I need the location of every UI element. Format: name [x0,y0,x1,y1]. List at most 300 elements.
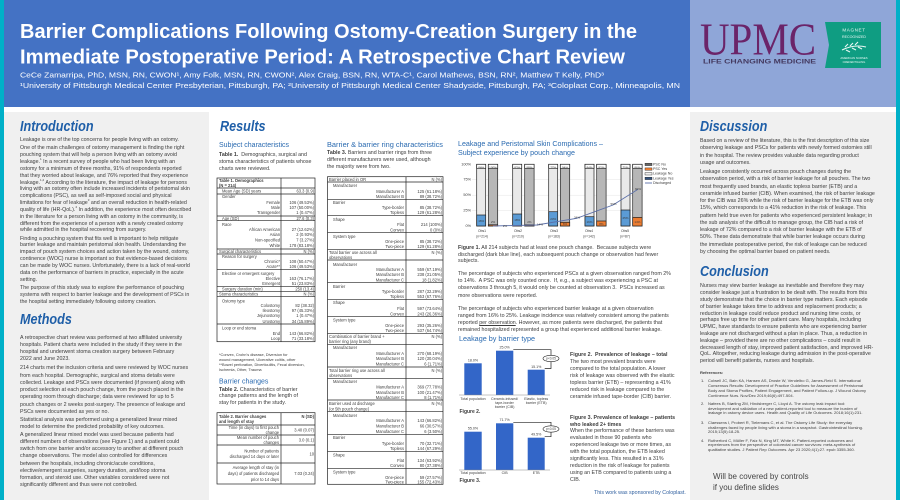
chart: figure 2 leakage total: Total population [460,397,486,401]
table 3: barrier and ring characteristics: Topless [390,294,404,299]
discussion paragraph 2: for the CIB was 26% while the risk of barrier leakage for the ETB was only [700,198,873,204]
introduction paragraph 3: data on the performance of barriers in practice, especially in the acute [20,270,184,276]
methods paragraph 3: switch from one barrier and/or accessory to another at different pouch [20,446,183,452]
chart: figure 1 stacked bars by pouch change: 59% [610,202,617,206]
table 3: barrier and ring characteristics: Barrier used at discharge [329,401,375,406]
text block: table 3 caption: the majority were from two. [327,164,391,170]
table 1: demographics: Surgery duration (min) [222,286,263,292]
text block: leakage findings: The percentage of subjects who experienced barrier leakage at a given observation [458,306,654,312]
methods paragraph 2: PSCs were documented as yes or no. [20,409,109,415]
table 2: barrier change patterns: changes [264,440,279,445]
chart: figure 1 stacked bars by pouch change: Obs4 [585,229,593,233]
table 3: barrier and ring characteristics: Manufacturer B [376,272,404,277]
table 1: demographics: Race [222,222,232,227]
text block: references: Body and Stoma Profiles, Patient Engagement, and Patient Follow-up. J Wound Ostomy [708,388,866,393]
table 3: barrier and ring characteristics: 70 (32.71%) [420,441,443,446]
table 1: demographics: 71 (33.18%) [292,336,315,341]
table 2: barrier change patterns: Table 2. Barrier changes [219,414,267,419]
chart: figure 1 stacked bars by pouch change: 6% [563,222,567,226]
table 3: barrier and ring characteristics: Shape [333,452,346,458]
chart: figure 3 leakage 2+ times: ETB [533,471,540,475]
table 3: barrier and ring characteristics: Convex [390,312,404,316]
text block: table 3 caption [327,150,432,170]
heading: results: Results [220,119,266,135]
table 3: barrier and ring characteristics: 134 (63.92%) [417,458,443,463]
table 1: demographics: 82 (38.32) [295,303,315,308]
methods paragraph 1: A retrospective chart review was performed at two affiliated university [20,335,182,341]
chart: figure 1 stacked bars by pouch change: Obs2 [514,229,522,233]
text block: conclusion: UPMC, have standards to ensure patients who are experiencing barrier [700,324,867,330]
text block: figure 2 description: Figure 2. Prevalence of leakage – total [570,352,667,358]
table 3: barrier and ring characteristics: Manufacturer C [376,395,404,400]
chart: figure 1 stacked bars by pouch change: (n=87) [620,235,630,239]
text block: references: Claessens I, Probert R, Tielemans C, et al. The Ostomy Life Study: the everyday [708,420,852,425]
chart: figure 1 stacked bars by pouch change: 14% [634,220,641,224]
table 1: demographics: Chronic* [264,259,280,264]
table 3: barrier and ring characteristics: System type [333,234,356,239]
table 3: barrier and ring characteristics: Manufacturer [333,413,358,418]
text block: conclusion: decreased length of stay, improved patient satisfaction, and improved HR- [700,345,873,351]
chart: figure 1 stacked bars by pouch change: 8% [599,222,604,226]
header band: title area [0,0,690,107]
title: Barrier Complications Following Ostomy-Creation Surgery in the [20,21,637,43]
text block: references: Continence Nurs. Nov/Dec 2019;46(6):497-504. [708,392,794,398]
table 3: barrier and ring characteristics: observations [329,373,352,378]
introduction paragraph 3: can be made by WOC nurses. Unfortunately, there is a lack of real-world [20,263,190,269]
table 1: demographics: 1 (0.47%) [296,210,315,215]
text block: figure 1 caption: discharged (dark blue line), each subsequent pouch change or observation had fewer [458,252,658,258]
table 2: barrier change patterns [217,413,315,484]
table 3: barrier and ring characteristics: 143 (66.82%) [417,418,443,423]
table 1: demographics: Elective or emergent surgery [222,271,275,276]
table 3: barrier and ring characteristics: N (%) [432,368,443,373]
table 1: demographics: Mean Age (SD) years [222,188,261,194]
table 1: demographics: Asian [270,232,281,237]
heading: leakage and peristomal skin complications: Subject experience by pouch change [458,150,575,157]
methods paragraph 3: different numbers of observations (see Figure 1) and a patient could [20,439,179,445]
discussion paragraph 2: 50%. These data demonstrate that while barrier leakage occurs during [700,234,865,240]
discussion paragraph 1: observing leakage and PSCs for patients with newly formed ostomies still [700,145,872,151]
text block: conclusion: period will benefit patients, nurses and hospitals. [700,358,814,364]
table 1: demographics: 27 (12.62%) [292,227,315,232]
table 2: barrier change patterns: Time (in days) to first pouch [229,425,280,430]
placeholder note: if you define slides [713,483,779,492]
table 3: barrier and ring characteristics: Manufacturer [333,183,358,188]
text block: PSC findings [458,271,671,299]
table 2: barrier change patterns: change [266,430,280,435]
table 1: demographics: 51 (23.83%) [292,281,315,286]
text block: conclusion: leakage – provided there are no other complications – could result in [700,338,860,344]
table 3: barrier and ring characteristics [328,177,443,484]
text block: references: development and validation of a new patient-reported tool to measure the burden of [708,406,857,411]
text block: figure 3 description: CIB. [570,477,580,483]
chart: figure 1 stacked bars by pouch change: 16% [586,220,593,224]
table 3: barrier and ring characteristics: Combination of barrier brand + [329,334,385,339]
table 3: barrier and ring characteristics: Manufacturer B [376,356,404,361]
table 3: barrier and ring characteristics: Two-piece [385,328,405,333]
heading: conclusion: Conclusion [700,264,769,280]
figure 2 label: Figure 2. [460,409,481,415]
table 3: barrier and ring characteristics: 8 (1.71%) [424,395,443,400]
table 3: barrier and ring characteristics: barrier ring (any brand) [329,339,372,344]
chart: figure 2 leakage total [459,346,559,409]
discussion paragraph 1: in the hospital. The review provides valuable data regarding product [700,153,859,159]
text block: figure 2 description: topless barrier (ETB) – representing a 41% [570,380,671,386]
table 3: barrier and ring characteristics: 80 (37.38%) [420,463,443,468]
methods paragraph 2: product selection at each pouch change, from the pouch placed in the [20,387,183,393]
introduction paragraph 2: leakage.1,2 According to the literature, the impact of leakage for persons [20,178,187,186]
table 3: barrier and ring characteristics: Manufacturer B [376,424,404,428]
introduction paragraph 2: living with an ostomy often include increased incidents of peristomal skin [20,186,190,192]
chart: figure 1 stacked bars by pouch change: 23% [550,217,557,221]
table 1: demographics: Surgical characteristics [219,249,261,254]
heading: introduction: Introduction [20,119,94,135]
text block: PSC findings: The percentage of subjects who experienced PSCs at a given observation ranged from 2% [458,271,671,277]
table 1: demographics: 27.6 (0.3) [296,216,315,221]
table 1: demographics: Stoma characteristics [219,292,258,296]
chart: figure 1 stacked bars by pouch change: 84% [586,166,593,170]
methods paragraph 3: elective/emergent surgeries, surgery duration, and/loop stoma [20,468,165,474]
table 3: barrier and ring characteristics: Manufacturer B [376,194,404,199]
table 3: barrier and ring characteristics: N (%) [432,334,443,339]
discussion paragraph 1 [700,138,872,166]
chart: figure 1 stacked bars by pouch change: 25% [622,216,629,220]
chart: figure 1 stacked bars by pouch change: 82% [514,166,521,170]
text block: figure 3 description [570,415,675,483]
placeholder note [713,472,809,492]
table 3: barrier and ring characteristics: Convex [390,228,404,232]
chart: figure 2 leakage total: Ceramic-infused/ [491,397,518,401]
table 3: barrier and ring characteristics: Manufacturer A [376,418,404,423]
chart: figure 1 stacked bars by pouch change: 16% [478,219,485,223]
heading: methods: Methods [20,312,72,328]
table 3: barrier and ring characteristics: 18 (1.82%) [422,278,443,282]
placeholder note: Will be covered by controls [713,472,809,481]
chart: figure 2 leakage total: 18.0% [468,358,479,362]
table 3: barrier and ring characteristics: System type [333,470,356,474]
text block: introduction [20,137,191,305]
table 3: barrier and ring characteristics: Topless [390,446,404,451]
chart: figure 2 leakage total: 25.0% [499,346,510,350]
chart: figure 1 stacked bars by pouch change [461,162,674,239]
methods paragraph 2 [20,365,188,415]
text block: figure 3 description: reduction in the risk of leakage for patients [570,463,670,469]
logo: UPMC: LIFE CHANGING MEDICINE [703,58,817,66]
table 1: demographics: 106 (49.53%) [289,264,315,269]
introduction paragraph 2 [20,145,191,233]
table 3: barrier and ring characteristics: 287 (32.29%) [417,289,443,294]
discussion paragraph 2: most frequently used brands, an elastic topless barrier (ETB) and a [700,184,857,190]
table 3: barrier and ring characteristics: 238 (31.05%) [417,272,443,277]
chart: figure 3 leakage 2+ times: 49.5% [531,432,542,436]
methods paragraph 3: between the hospitals, including chronic/acute conditions, [20,460,155,466]
table 1: demographics: 143 (66.82%) [289,331,315,336]
text block: references: leakage in ostomy device users. Health and Quality of Life Outcomes. 2018;16(1):231. [708,410,863,415]
introduction paragraph 4: The purpose of this study was to explore the performance of pouching [20,285,184,291]
text block: table 2 caption: stay for patients in the study. [219,400,286,406]
chart: figure 1 stacked bars by pouch change: 2% [527,220,532,224]
table 3: barrier and ring characteristics: 155 (72.43%) [417,480,443,484]
icon: magnet recognized badge: CREDENTIALING [843,60,865,64]
methods paragraph 2: collected. Leakage and PSCs were documented (if present) along with [20,380,185,386]
text block: table 1 footnotes: wound management, Ulcerative colitis, other [219,357,296,362]
text block: leakage findings: ranged from 16% to 25%. Leakage incidence was relatively consistent among the patients [458,313,669,319]
text block: figure 1 caption [458,245,658,264]
table 3: barrier and ring characteristics: 100 (21.47%) [417,390,443,395]
table 3: barrier and ring characteristics: 597 (73.64%) [417,306,443,311]
text block: table 1 footnotes: *Convex, Crohn's disease, Diversion for [219,352,288,357]
table 3: barrier and ring characteristics: 6 (1.71%) [424,362,443,366]
text block: references: Consensus Results: Development of Practice Guidelines for Assessment of Peristomal [708,383,863,388]
chart: figure 1 stacked bars by pouch change: (n=183) [548,235,560,239]
table 3: barrier and ring characteristics: Barrier placed in OR [329,177,366,182]
text block: table 1 caption [219,152,312,172]
text block: references: 2015;13(5):18-25. [708,429,740,434]
subheading: subject characteristics: Subject characteristics [219,142,290,149]
discussion paragraph 1: Based on a review of the literature, this is the first description of this size [700,138,869,144]
chart: figure 1 stacked bars by pouch change: 75% [463,178,472,182]
table 1: demographics: Jejunostomy [257,313,281,318]
discussion paragraph 2: 15%, which corresponds to a 41% reduction in the risk of leakage. This [700,205,866,211]
table 3: barrier and ring characteristics: N (%) [432,401,443,406]
discussion paragraph 2: by choosing the optimal barrier based on patient needs. [700,249,830,255]
table 3: barrier and ring characteristics: One-piece [385,239,405,244]
table 3: barrier and ring characteristics: Type-border [382,289,405,294]
table 1: demographics: Emergent [262,281,281,286]
text block: table 1 footnotes: **Bowel perforation, Diverticulitis, Fecal diversion, [219,362,305,367]
text block: table 1 caption: Table 1. Demographics, surgical and [219,152,307,158]
discussion paragraph 2: observation period, with a risk of barrier leakage for all pouches. The two [700,176,870,182]
table 3: barrier and ring characteristics: Flat [397,222,405,227]
introduction paragraph 2: One of the main challenges of ostomy management is finding the right [20,145,184,151]
table 1: demographics: Urostomy [262,319,281,324]
text block: table 2 caption: change patterns and the length of [219,393,298,399]
chart: figure 1 stacked bars by pouch change: 84% [478,166,485,170]
right accent strip [896,0,900,500]
subheading: barrier and barrier ring characteristics: Barrier & barrier ring characteristics [327,142,444,149]
table 1: demographics: White [270,243,281,248]
table 3: barrier and ring characteristics: 66 (30.57%) [420,424,443,428]
table 3: barrier and ring characteristics: Shape [333,217,346,222]
text block: figure 2 description: ceramide infused tape-border (CIB) barrier. [570,394,671,400]
chart: figure 3 leakage 2+ times: CIB [502,471,508,475]
discussion paragraph 2: leakage of 72% compared to a risk of barrier leakage with the ETB of [700,227,862,233]
table 3: barrier and ring characteristics: Manufacturer B [376,390,404,395]
chart: figure 2 leakage total: barrier (CIB) [495,405,514,409]
introduction paragraph 2: while admitted in the hospital recovering from surgery. [20,227,146,233]
introduction paragraph 2: in the literature for a person living with an ostomy in the community, is [20,214,183,220]
icon: magnet recognized badge [825,22,881,68]
introduction paragraph 2: quality of life (HR-QoL).4 In addition, the experience most often described [20,205,191,213]
text block: references: qualitative studies. J Patient Rep Outcomes. Apr 23 2020;4(1):27. epub 3355-360. [708,447,855,452]
table 1: demographics: N (%) [304,292,315,296]
table 3: barrier and ring characteristics: N (%) [432,177,443,182]
table 3: barrier and ring characteristics: Type-border [382,441,405,446]
table 3: barrier and ring characteristics: Topless [390,210,404,215]
chart: figure 1 stacked bars by pouch change: (n=214) [476,235,488,239]
table 1: demographics: Ostomy type [222,298,246,304]
methods paragraph 1: hospital and underwent stoma creation surgery between February [20,349,174,355]
table 1: demographics: End [273,331,281,336]
table 2: barrier change patterns: N (SD) [301,414,315,419]
table 2: barrier change patterns: prior to 14 days [251,477,279,482]
table 3: barrier and ring characteristics: Total barrier use across all [329,250,377,255]
text block: PSC findings: observations 3 through 5, it would only be counted at observation 3. PSCs increased as [458,285,665,291]
text block: table 3 caption: different manufacturers were used, although [327,157,431,163]
table 3: barrier and ring characteristics: 59 (27.57%) [420,475,443,480]
text block: figure 3 description: with the total population, the ETB leaked [570,449,665,455]
chart: figure 1 stacked bars by pouch change: 100% [489,166,497,170]
table 3: barrier and ring characteristics: One-piece [385,475,405,480]
introduction paragraph 2: complications (PSC), as well as self-imposed social and physical [20,193,172,199]
table 1: demographics: African American [249,227,281,232]
table 2: barrier change patterns: 3.0 (0.1) [299,438,315,442]
text block: conclusion: consider leakage just a frustration to be dealt with. The results from this [700,290,867,296]
table 2: barrier change patterns: 10 [309,452,315,456]
panel: right column background [690,112,896,500]
table 3: barrier and ring characteristics: Flat [397,458,405,463]
introduction paragraph 3: impact of pouch system choices and action taken by the wound, ostomy, [20,249,190,255]
table 3: barrier and ring characteristics: 0 (0%) [430,228,443,232]
table 1: demographics: (N = 214) [219,183,237,188]
table 1: demographics: Table 1. Demographics [219,178,264,183]
table 2: barrier change patterns: and length of stay [219,419,255,424]
table 1: demographics: 163 (76.17%) [289,276,315,281]
text block: conclusion [700,283,874,364]
table 3: barrier and ring characteristics: Manufacturer C [376,362,404,366]
chart: figure 1 stacked bars by pouch change: Obs1 [478,229,486,233]
chart: figure 1 stacked bars by pouch change: 34% [574,216,580,220]
chart: figure 1 stacked bars by pouch change: Obs5 [621,229,629,233]
chart: figure 1 stacked bars by pouch change: 94% [562,166,568,170]
table 3: barrier and ring characteristics: 270 (68.19%) [417,351,443,356]
table 2: barrier change patterns: Average length of stay (in [233,465,280,470]
table 3: barrier and ring characteristics: One-piece [385,323,405,328]
text block: table 1 footnotes: Ischemia, Other, Trauma [219,367,262,372]
chart: figure 1 stacked bars by pouch change: (n=210) [512,235,524,239]
chart: figure 1 stacked bars by pouch change: 86% [634,166,641,170]
title [20,21,637,68]
table 3: barrier and ring characteristics: 85 (38.72%) [420,239,443,244]
table 1: demographics: Reason for surgery [222,254,258,259]
text block: conclusion: study demonstrate that the choice in barrier type matters. Each episode [700,297,868,303]
chart legend [645,162,674,185]
chart: figure 2 leakage total: p<0.05 [546,356,556,360]
table 3: barrier and ring characteristics: 369 (77.78%) [417,384,443,390]
text block: figure 1 caption: subjects. [458,258,479,264]
text block: figure 3 description: experienced leakage two or more times, as [570,442,671,448]
text block: PSC findings: more observations were reported. [458,293,537,299]
chart: figure 1 stacked bars by pouch change: 18% [514,218,521,222]
table 3: barrier and ring characteristics: Manufacturer [333,379,358,384]
text block: leakage findings [458,306,669,333]
chart: figure 1 stacked bars by pouch change: 92% [598,166,605,170]
table 3: barrier and ring characteristics: Total barrier ring use across all [329,368,385,373]
chart legend: Leakage No [653,172,672,176]
table 1: demographics: Age (SD) [222,216,239,221]
text block: figure 2 description: reduced risk in leakage compared to the [570,387,664,393]
table 1: demographics: 250 (13.4) [295,286,315,292]
table 3: barrier and ring characteristics: 293 (35.26%) [417,323,443,328]
methods paragraph 3: Statistical analysis was performed using a generalized linear mixed [20,417,177,423]
table 1: demographics: Gender [222,194,236,199]
text block: figure 1 caption: Figure 1. All 214 subjects had at least one pouch change. Because subjects were [458,245,651,251]
table 3: barrier and ring characteristics: (or 5th pouch change) [329,406,370,412]
introduction paragraph 3: barrier leakage and maintain peristomal skin health. Understanding the [20,242,186,248]
table 3: barrier and ring characteristics: Manufacturer A [376,351,404,356]
methods paragraph 3: formation, and steroid use. Other variables considered were not [20,475,169,481]
text block: table 3 caption: Table 3. Barriers and barrier rings from three [327,150,432,156]
methods paragraph 2: pouch changes or 2 weeks post-surgery. The presence of leakage and [20,402,185,408]
text block: table 1 footnotes [219,352,305,372]
chart: figure 1 stacked bars by pouch change: 75% [622,166,629,170]
text block: references: challenges faced by people living with a stoma in a snapshot. Gastrointestinal Nursing. [708,425,863,430]
text block: references [700,370,866,452]
heading: leakage and peristomal skin complications: Leakage and Peristomal Skin Complications – [458,141,603,148]
text block: figure 3 description: significantly less. This resulted in a 31% [570,456,664,462]
icon: magnet recognized badge: RECOGNIZED [842,35,866,39]
introduction paragraph 3: setting. [20,277,37,283]
table 2: barrier change patterns: 7.03 (0.24) [294,471,315,476]
reference 3 [701,420,863,434]
icon: magnet recognized badge: MAGNET [842,28,866,32]
methods paragraph 2: from each hospital. Demographic, surgical and stoma details were [20,373,175,379]
table 2: barrier change patterns: Number of patients [244,448,279,454]
table 1: demographics: Loop or end stoma [222,326,257,330]
reference 3: 3. [701,420,704,425]
table 3: barrier and ring characteristics: System type [333,318,356,322]
table 3: barrier and ring characteristics: Two-piece [385,480,405,484]
table 1: demographics: 108 (50.47%) [289,259,315,264]
methods paragraph 3: model to determine the predicted probability of key outcomes. [20,424,165,430]
reference 2: 2. [701,401,704,406]
table 3: barrier and ring characteristics: 129 (61.28%) [417,210,443,215]
text block: table 1 caption: stoma characteristics of patients whose [219,159,311,165]
table 1: demographics: 97 (45.33%) [292,308,315,313]
table 1: demographics: 106 (49.53%) [289,200,315,205]
chart: figure 3 leakage 2+ times [459,418,559,475]
sponsor note: This work was sponsored by Coloplast. [594,490,686,496]
table 1: demographics: Female [266,200,281,205]
table 1: demographics: 7 (3.27%) [296,238,315,242]
table 3: barrier and ring characteristics: 6 (3.50%) [424,429,443,434]
methods paragraph 1 [20,335,182,362]
chart: figure 1 stacked bars by pouch change: 60% [635,187,641,191]
table 3: barrier and ring characteristics: Barrier [333,284,346,289]
text block: table 1 caption: charts were reviewed. [219,166,271,172]
introduction paragraph 3: continence (WOC) nurse is important so that evidence-based decisions [20,256,187,262]
methods paragraph 2: 214 charts met the inclusion criteria and were reviewed by WOC nurses [20,365,188,371]
reference 2 [701,401,863,415]
table 3: barrier and ring characteristics: observations [329,255,352,260]
text block: leakage findings: reported per observation. However, as more patients were discharged, the patients that [458,320,662,326]
discussion paragraph 1: usage and outcomes. [700,160,751,166]
subheading: leakage by barrier type: Leakage by barrier type [459,336,535,343]
table 3: barrier and ring characteristics: 125 (61.18%) [417,189,443,194]
table 1: demographics: 1 (0.47%) [296,313,315,318]
text block: figure 3 description: When the performance of these barriers was [570,428,675,434]
chart: figure 1 stacked bars by pouch change: 14% [537,222,543,226]
table 1: demographics: 63.3 (0.9) [296,188,315,194]
icon: magnet recognized badge: AMERICAN NURSES [840,56,868,60]
table 1: demographics: Acute** [266,264,280,269]
subheading: barrier changes: Barrier changes [219,378,269,386]
reference 4 [701,438,856,452]
table 3: barrier and ring characteristics: 214 (100%) [421,222,443,227]
chart legend: Discharged [653,181,671,185]
table 3: barrier and ring characteristics: Convex [390,463,404,468]
text block: conclusion: of barrier leakage takes time to address and replacement products; a [700,304,862,310]
